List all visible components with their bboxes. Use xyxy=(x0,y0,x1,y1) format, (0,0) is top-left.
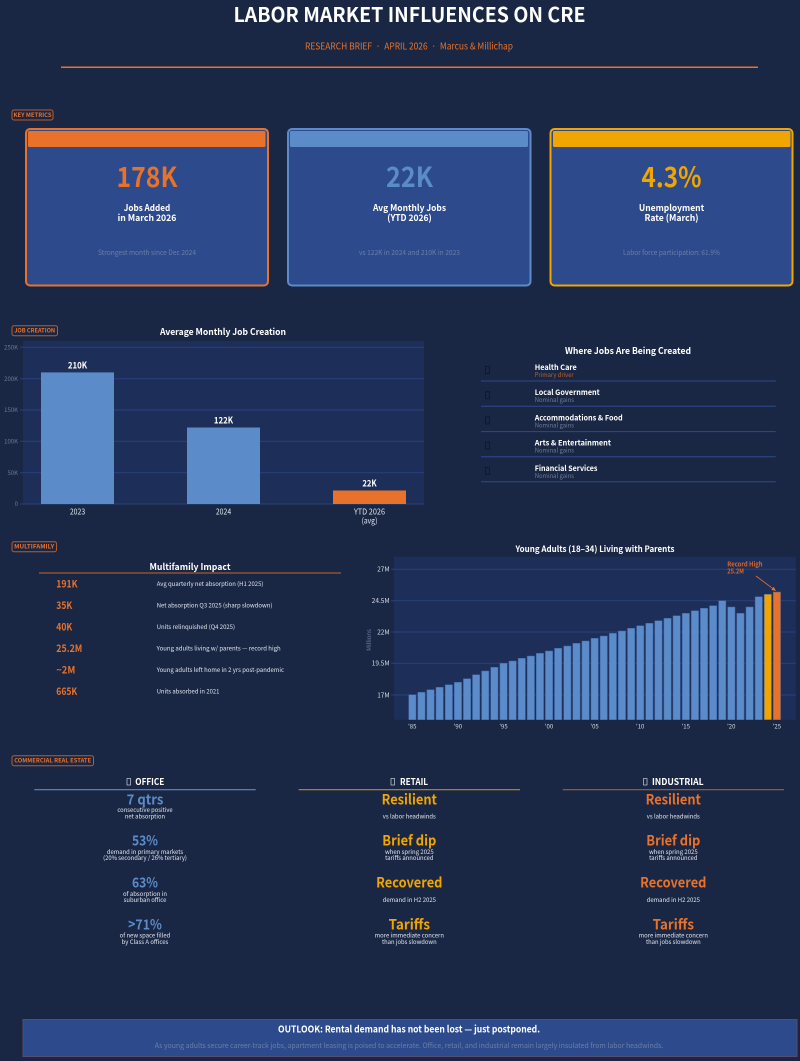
stat: over 71%: by Class A offices xyxy=(122,937,169,946)
stat: over 71%: >71% xyxy=(128,915,162,935)
bar chart: young adults living with parents: '90 xyxy=(454,722,463,730)
stat: 7 qtrs: net absorption xyxy=(125,812,165,820)
stat: brief dip xyxy=(646,831,700,862)
stat: recovered: demand in H2 2025 xyxy=(383,895,436,904)
section tag: commercial real estate: COMMERCIAL REAL ESTATE xyxy=(14,756,91,765)
bar chart: young adults living with parents: '10 xyxy=(636,722,645,730)
metric value: 178K xyxy=(116,156,178,196)
office header: OFFICE xyxy=(135,775,164,788)
panel heading: Multifamily Impact xyxy=(150,560,231,573)
stat: 35K: Net absorption Q3 2025 (sharp slowdown) xyxy=(157,600,272,609)
header rule xyxy=(61,66,758,68)
row: financial services xyxy=(481,463,776,482)
stat: 63%: 63% xyxy=(132,873,158,893)
bar chart: young adults living with parents: '95 xyxy=(499,722,508,730)
stat: 35K xyxy=(56,597,272,612)
bar: 2023: 2023 xyxy=(70,506,85,518)
stat: brief dip: when spring 2025 xyxy=(385,847,434,856)
bar: 2025 record high xyxy=(773,592,781,720)
outlook headline: OUTLOOK: Rental demand has not been lost — just postponed. xyxy=(278,1022,540,1036)
bar chart: average monthly job creation: 100K xyxy=(4,436,18,446)
metric label: Unemployment xyxy=(639,201,704,214)
stat: resilient: vs labor headwinds xyxy=(383,812,436,820)
row: local government: Nominal gains xyxy=(535,394,574,404)
metric value: 4.3% xyxy=(642,156,702,196)
bars 1985 to 2023 xyxy=(409,597,762,720)
stat: tariffs xyxy=(639,915,708,946)
bar chart: young adults living with parents: '85 xyxy=(408,722,416,730)
row: accommodations and food: Accommodations & Food xyxy=(534,412,623,423)
bar chart: average monthly job creation xyxy=(4,325,424,526)
bar chart: young adults living with parents: 27M xyxy=(377,564,390,574)
arrow: to record high bar xyxy=(756,576,776,591)
stat: 35K: 35K xyxy=(56,597,72,612)
panel: retail xyxy=(299,775,520,946)
metric label: Jobs Added xyxy=(124,201,170,214)
bar chart: young adults living with parents: '25 xyxy=(773,722,781,730)
row: health care xyxy=(481,362,776,381)
section tag: job creation: JOB CREATION xyxy=(14,326,55,335)
row: arts and entertainment xyxy=(481,438,776,457)
bar: 2023 xyxy=(41,358,114,518)
stat: tariffs: Tariffs xyxy=(653,915,694,935)
stat: 25.2M: 25.2M xyxy=(56,640,82,655)
panel: unemployment card xyxy=(550,129,792,286)
stat: brief dip xyxy=(382,831,436,862)
panel: industrial xyxy=(563,775,784,946)
bar: 2023: 210K xyxy=(68,358,88,371)
stat: tariffs: Tariffs xyxy=(389,915,430,935)
retail header: RETAIL xyxy=(400,775,428,788)
row: health care: Primary driver xyxy=(535,369,574,379)
metric value: 22K xyxy=(386,156,434,196)
stat: brief dip: Brief dip xyxy=(646,831,700,851)
stat: about 2M: Young adults left home in 2 yrs post-pandemic xyxy=(156,665,284,674)
bar: YTD 2026: 22K xyxy=(362,476,377,489)
stat: recovered: Recovered xyxy=(376,873,442,893)
stat: 665K: Units absorbed in 2021 xyxy=(157,686,219,695)
bar chart: average monthly job creation: 250K xyxy=(4,342,18,352)
panel: where jobs are being created xyxy=(481,344,776,482)
panel: office xyxy=(34,775,256,946)
axis label: Millions xyxy=(364,629,373,651)
chart title: Young Adults (18–34) Living with Parents xyxy=(515,543,674,555)
stat: 7 qtrs: consecutive positive xyxy=(117,805,173,814)
stat: 53%: demand in primary markets xyxy=(107,847,183,856)
stat: brief dip: tariffs announced xyxy=(649,853,698,862)
bar chart: young adults living with parents: 17M xyxy=(377,689,390,699)
annotation: record high: 25.2M xyxy=(727,565,744,575)
stat: 665K xyxy=(56,683,219,698)
bar: YTD 2026: YTD 2026 xyxy=(353,506,386,518)
stat: resilient xyxy=(382,789,437,820)
metric note: Labor force participation: 61.9% xyxy=(623,248,721,258)
stat: 63% xyxy=(123,873,167,904)
stat: 53%: 53% xyxy=(132,831,158,851)
panel: multifamily impact xyxy=(39,560,341,698)
bar chart: average monthly job creation: 200K xyxy=(4,374,18,383)
stat: tariffs: more immediate concern xyxy=(375,930,444,940)
metric label xyxy=(118,201,176,224)
list heading: Where Jobs Are Being Created xyxy=(565,344,691,357)
bar chart: young adults living with parents: 22M xyxy=(377,626,390,636)
row: accommodations and food xyxy=(481,412,776,432)
stat: 63%: suburban office xyxy=(124,895,167,904)
stat: brief dip: Brief dip xyxy=(382,831,436,851)
annotation: record high xyxy=(727,558,763,575)
bar chart: young adults living with parents: '15 xyxy=(682,722,690,730)
panel: outlook xyxy=(23,1020,797,1056)
stat: recovered xyxy=(640,873,706,904)
stat: about 2M: ~2M xyxy=(56,661,75,676)
bar chart: young adults living with parents: 19.5M xyxy=(372,658,390,668)
stat: tariffs: than jobs slowdown xyxy=(382,937,437,946)
panel: avg monthly jobs card xyxy=(288,129,530,286)
section tag: multifamily: MULTIFAMILY xyxy=(14,542,55,551)
bar chart: young adults living with parents: '05 xyxy=(590,722,599,730)
stat: resilient: vs labor headwinds xyxy=(647,812,700,820)
stat: about 2M xyxy=(56,661,284,676)
bar chart: average monthly job creation: 50K xyxy=(7,468,18,477)
stat: brief dip: tariffs announced xyxy=(385,853,434,862)
subtitle: RESEARCH BRIEF · APRIL 2026 · Marcus & Millichap xyxy=(305,38,513,52)
stat: 191K xyxy=(56,575,263,590)
header xyxy=(61,0,758,68)
stat: resilient: Resilient xyxy=(382,789,437,809)
stat: 25.2M: Young adults living w/ parents — record high xyxy=(156,643,281,652)
stat: recovered xyxy=(376,873,442,904)
stat: tariffs xyxy=(375,915,444,946)
stat: 53%: (20% secondary / 26% tertiary) xyxy=(103,853,187,862)
bar chart: young adults living with parents: '00 xyxy=(545,722,554,730)
stat: 40K: Units relinquished (Q4 2025) xyxy=(157,622,235,631)
stat: 191K: Avg quarterly net absorption (H1 2025) xyxy=(157,579,263,588)
stat: tariffs: than jobs slowdown xyxy=(646,937,701,946)
metric label: in March 2026 xyxy=(118,211,176,224)
bar: 2024 xyxy=(187,413,260,518)
bar: 2024: 2024 xyxy=(216,506,232,518)
stat: brief dip: when spring 2025 xyxy=(649,847,698,856)
bar: YTD 2026 xyxy=(333,476,406,526)
row: local government: Local Government xyxy=(535,387,601,398)
outlook detail: As young adults secure career-track jobs, apartment leasing is poised to accelerate. Office, retail, and industrial remain largely insulated from labor headwinds. xyxy=(155,1041,663,1051)
metric label xyxy=(372,201,447,224)
row: arts and entertainment: Arts & Entertainment xyxy=(534,438,612,449)
stat: over 71% xyxy=(120,915,171,946)
stat: 665K: 665K xyxy=(56,683,77,698)
bar chart: young adults living with parents: '20 xyxy=(727,722,736,730)
row: local government xyxy=(481,387,776,406)
stat: 25.2M xyxy=(56,640,281,655)
row: health care: Health Care xyxy=(535,362,577,373)
stat: over 71%: of new space filled xyxy=(120,930,171,940)
metric label xyxy=(639,201,704,224)
chart title: Average Monthly Job Creation xyxy=(159,325,286,338)
stat: resilient: Resilient xyxy=(646,789,701,809)
metric label: Avg Monthly Jobs xyxy=(372,201,447,214)
annotation: record high: Record High xyxy=(727,558,763,568)
stat: resilient xyxy=(646,789,701,820)
metric label: (YTD 2026) xyxy=(387,211,432,224)
bar: 2024: 122K xyxy=(214,413,234,426)
stat: 63%: of absorption in xyxy=(123,889,167,898)
bar chart: young adults living with parents xyxy=(364,543,796,730)
metric note: vs 122K in 2024 and 210K in 2023 xyxy=(359,248,460,258)
stat: 7 qtrs xyxy=(117,789,173,820)
row: accommodations and food: Nominal gains xyxy=(535,419,574,429)
stat: 40K: 40K xyxy=(56,618,72,633)
stat: 40K xyxy=(56,618,235,633)
panel: jobs added card xyxy=(26,129,268,286)
metric note: Strongest month since Dec 2024 xyxy=(98,248,196,258)
metric label: Rate (March) xyxy=(644,211,698,224)
stat: 191K: 191K xyxy=(56,575,78,590)
row: arts and entertainment: Nominal gains xyxy=(535,445,574,455)
stat: 53% xyxy=(103,831,187,862)
section tag: key metrics: KEY METRICS xyxy=(14,110,52,119)
row: financial services: Nominal gains xyxy=(535,470,574,480)
bar chart: young adults living with parents: 24.5M xyxy=(372,595,390,605)
bar: YTD 2026: (avg) xyxy=(362,516,377,526)
stat: recovered: demand in H2 2025 xyxy=(647,895,700,904)
stat: recovered: Recovered xyxy=(640,873,706,893)
row: financial services: Financial Services xyxy=(535,463,598,474)
bar chart: average monthly job creation: 150K xyxy=(4,405,18,414)
bar: 2024 xyxy=(764,594,772,720)
stat: tariffs: more immediate concern xyxy=(639,930,708,940)
stat: 7 qtrs: 7 qtrs xyxy=(127,789,163,809)
industrial header: INDUSTRIAL xyxy=(652,775,704,788)
bar chart: average monthly job creation: 0 xyxy=(15,499,19,508)
